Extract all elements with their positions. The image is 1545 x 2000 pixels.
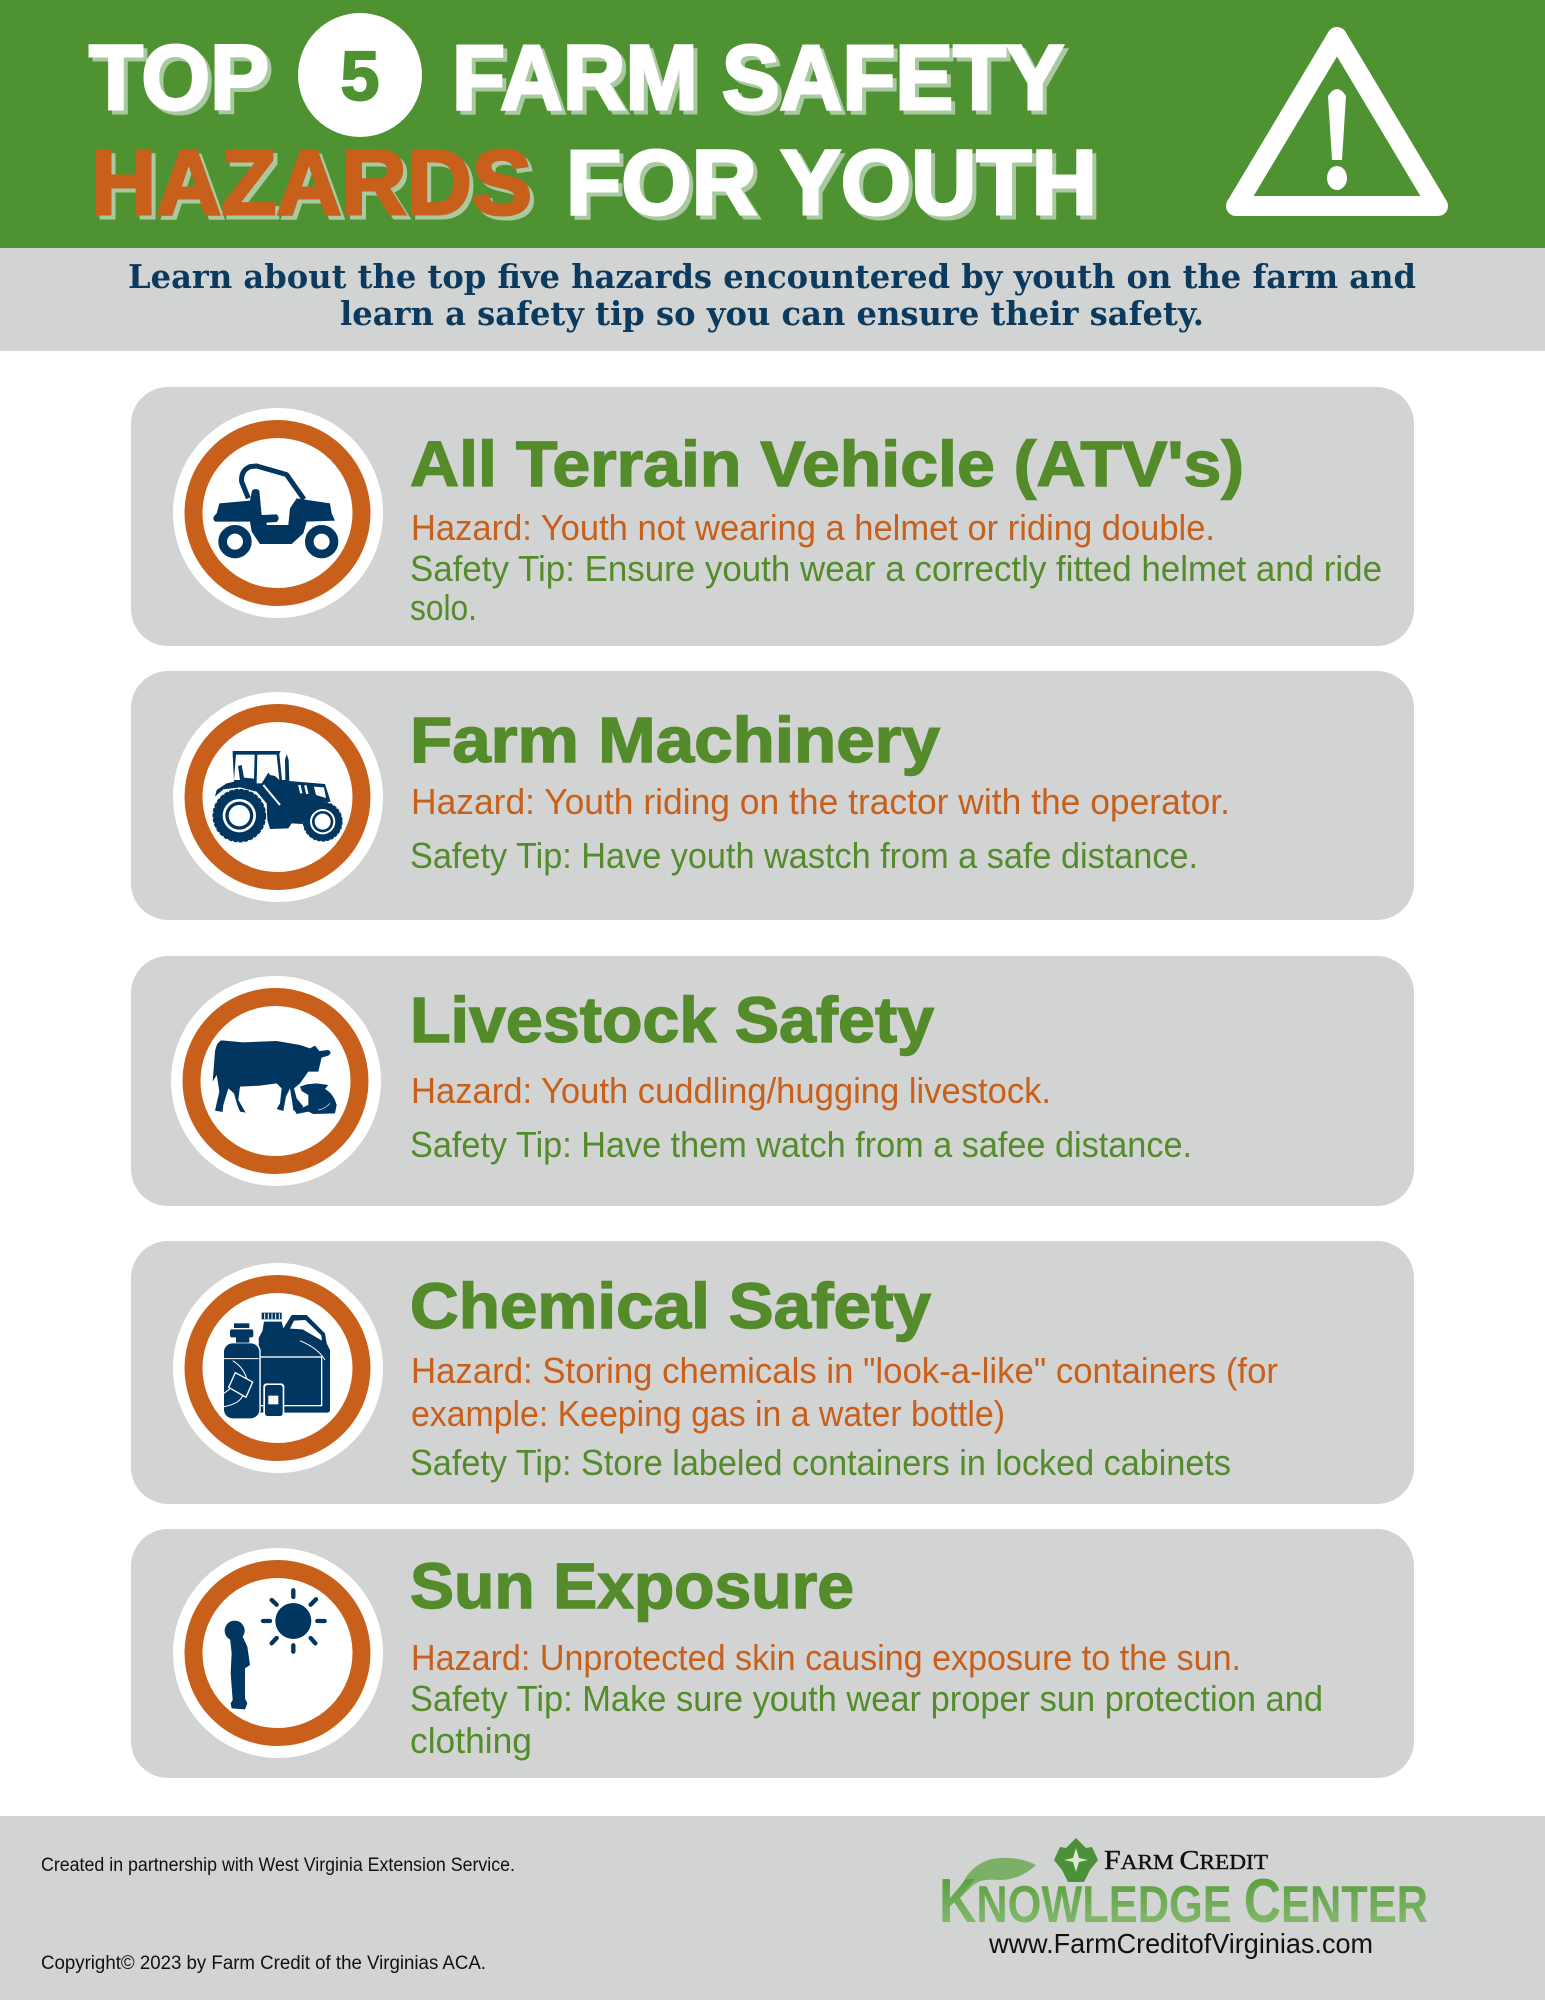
icon: tractor badge — [173, 692, 383, 902]
hazard text: Hazard: Youth riding on the tractor with the operator. — [411, 781, 1230, 822]
hazard text: Hazard: Unprotected skin causing exposure to the sun. — [411, 1637, 1241, 1678]
heading: Chemical Safety — [410, 1270, 931, 1342]
safety tip — [410, 548, 1382, 628]
title line one: 5 — [341, 37, 379, 115]
panel: farm machinery — [131, 671, 1414, 920]
title line two: FOR YOUTH — [570, 136, 1101, 238]
safety tip: Safety Tip: Have them watch from a safee distance. — [410, 1124, 1192, 1165]
heading: Sun Exposure — [410, 1550, 854, 1622]
logo: Farm Credit Knowledge Center — [939, 1838, 1428, 1959]
safety tip: Safety Tip: Have youth wastch from a safe distance. — [410, 835, 1198, 876]
icon: chemical containers badge — [173, 1263, 383, 1473]
title line one: FARM SAFETY — [452, 27, 1064, 129]
title line one: FARM SAFETY — [456, 31, 1068, 133]
hazard text: example: Keeping gas in a water bottle) — [411, 1393, 1005, 1434]
title line two — [91, 132, 1101, 238]
hazard text: Hazard: Storing chemicals in "look-a-like" containers (for — [411, 1350, 1278, 1391]
safety tip: clothing — [410, 1720, 532, 1761]
icon: cow badge — [171, 976, 381, 1186]
icon: leaf — [950, 1858, 1036, 1898]
panel: ATV — [131, 387, 1414, 646]
heading: All Terrain Vehicle (ATV's) — [410, 428, 1244, 500]
panel: livestock — [131, 956, 1414, 1206]
panel: chemical — [131, 1241, 1414, 1504]
footer — [0, 1816, 1545, 2000]
heading: Livestock Safety — [410, 984, 934, 1056]
icon: ATV badge — [173, 408, 383, 618]
intro text: Learn about the top five hazards encountered by youth on the farm and — [128, 257, 1416, 296]
wordmark Knowledge Center: KNOWLEDGE CENTER — [939, 1867, 1428, 1936]
panel: sun exposure — [131, 1529, 1414, 1778]
title line two: FOR YOUTH — [566, 132, 1097, 234]
title line one: TOP — [93, 31, 273, 133]
title line one — [89, 13, 1068, 137]
intro text: learn a safety tip so you can ensure their safety. — [340, 294, 1204, 333]
wordmark Farm Credit: FARM CREDIT — [1104, 1845, 1268, 1875]
title line one: TOP — [89, 27, 269, 129]
safety tip: Safety Tip: Store labeled containers in locked cabinets — [410, 1442, 1231, 1483]
safety tip: solo. — [410, 587, 477, 628]
icon: warning triangle — [1236, 37, 1438, 206]
intro band — [0, 248, 1545, 351]
title line two: HAZARDS — [95, 136, 536, 238]
icon: child and sun badge — [173, 1548, 383, 1758]
hazard text: Hazard: Youth not wearing a helmet or riding double. — [411, 507, 1215, 548]
copyright: Copyright© 2023 by Farm Credit of the Virginias ACA. — [41, 1953, 486, 1974]
hazard text — [411, 1350, 1278, 1434]
intro text — [128, 257, 1416, 333]
heading: Farm Machinery — [410, 704, 940, 776]
title line two: HAZARDS — [91, 132, 532, 234]
header banner — [0, 0, 1545, 248]
hazard text: Hazard: Youth cuddling/hugging livestock. — [411, 1070, 1051, 1111]
safety tip: Safety Tip: Make sure youth wear proper sun protection and — [410, 1678, 1323, 1719]
icon: clover — [1054, 1838, 1098, 1882]
safety tip — [410, 1678, 1323, 1761]
partnership note: Created in partnership with West Virginia Extension Service. — [41, 1855, 515, 1876]
website: www.FarmCreditofVirginias.com — [988, 1928, 1373, 1959]
safety tip: Safety Tip: Ensure youth wear a correctly fitted helmet and ride — [410, 548, 1382, 589]
